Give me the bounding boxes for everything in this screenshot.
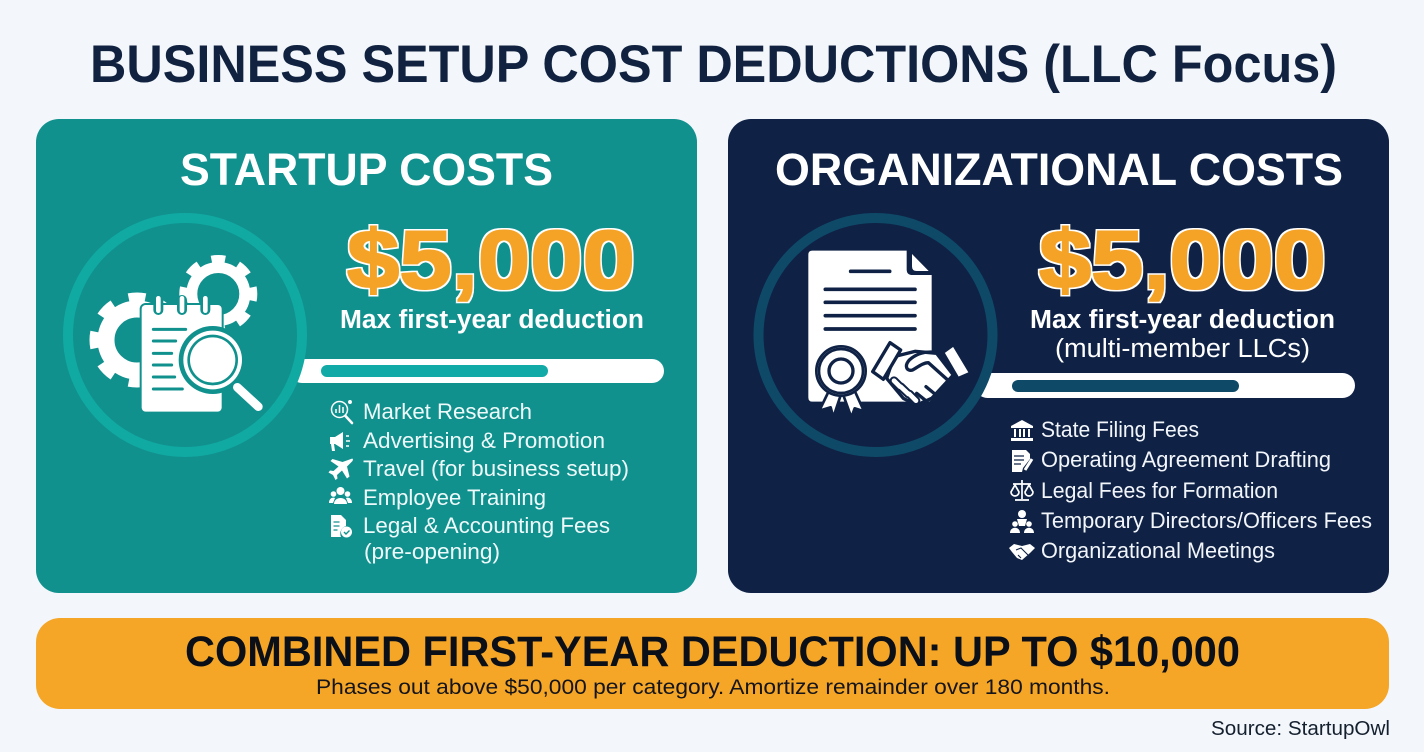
title: BUSINESS SETUP COST DEDUCTIONS (LLC Focus)	[90, 35, 1337, 94]
source: Source: StartupOwl	[1211, 718, 1390, 740]
banner: combined deduction	[36, 618, 1389, 709]
icon: gears, notepad and magnifier in ring	[68, 218, 302, 452]
item: organizational meetings: Organizational Meetings	[1041, 538, 1275, 563]
item: legal and accounting	[331, 513, 610, 564]
banner note: Phases out above $50,000 per category. Amortize remainder over 180 months.	[316, 675, 1110, 699]
list: startup cost items	[328, 399, 629, 564]
item: legal and accounting: Legal & Accounting Fees	[363, 513, 610, 538]
label: max first-year deduction: Max first-year deduction	[1030, 306, 1335, 334]
item: employee training: Employee Training	[363, 485, 546, 510]
heading: organizational costs: ORGANIZATIONAL COSTS	[775, 144, 1343, 195]
progress bar: organizational	[975, 373, 1355, 398]
list: organizational cost items	[1009, 417, 1372, 563]
item: legal and accounting: (pre-opening)	[364, 539, 500, 564]
handshake	[873, 343, 969, 405]
icon: document, rosette and handshake in ring	[758, 218, 992, 452]
banner heading: COMBINED FIRST-YEAR DEDUCTION: UP TO $10,000	[185, 628, 1240, 676]
label: max first-year deduction: Max first-year deduction	[340, 306, 644, 334]
amount: organizational: $5,000	[1039, 213, 1326, 306]
panel: startup costs	[36, 119, 697, 593]
panel: organizational costs	[728, 119, 1389, 593]
amount: startup: $5,000	[347, 213, 635, 306]
item: temporary directors: Temporary Directors/Officers Fees	[1041, 508, 1372, 533]
item: operating agreement drafting: Operating Agreement Drafting	[1041, 447, 1331, 472]
progress bar: startup	[290, 359, 664, 383]
item: advertising: Advertising & Promotion	[363, 428, 605, 453]
ribbon tails	[816, 346, 866, 417]
label: multi-member LLCs: (multi-member LLCs)	[1055, 335, 1310, 363]
heading: startup costs: STARTUP COSTS	[180, 144, 553, 195]
item: legal fees: Legal Fees for Formation	[1041, 478, 1278, 503]
item: travel: Travel (for business setup)	[363, 456, 629, 481]
item: state filing fees: State Filing Fees	[1041, 417, 1199, 442]
item: market research: Market Research	[363, 399, 532, 424]
